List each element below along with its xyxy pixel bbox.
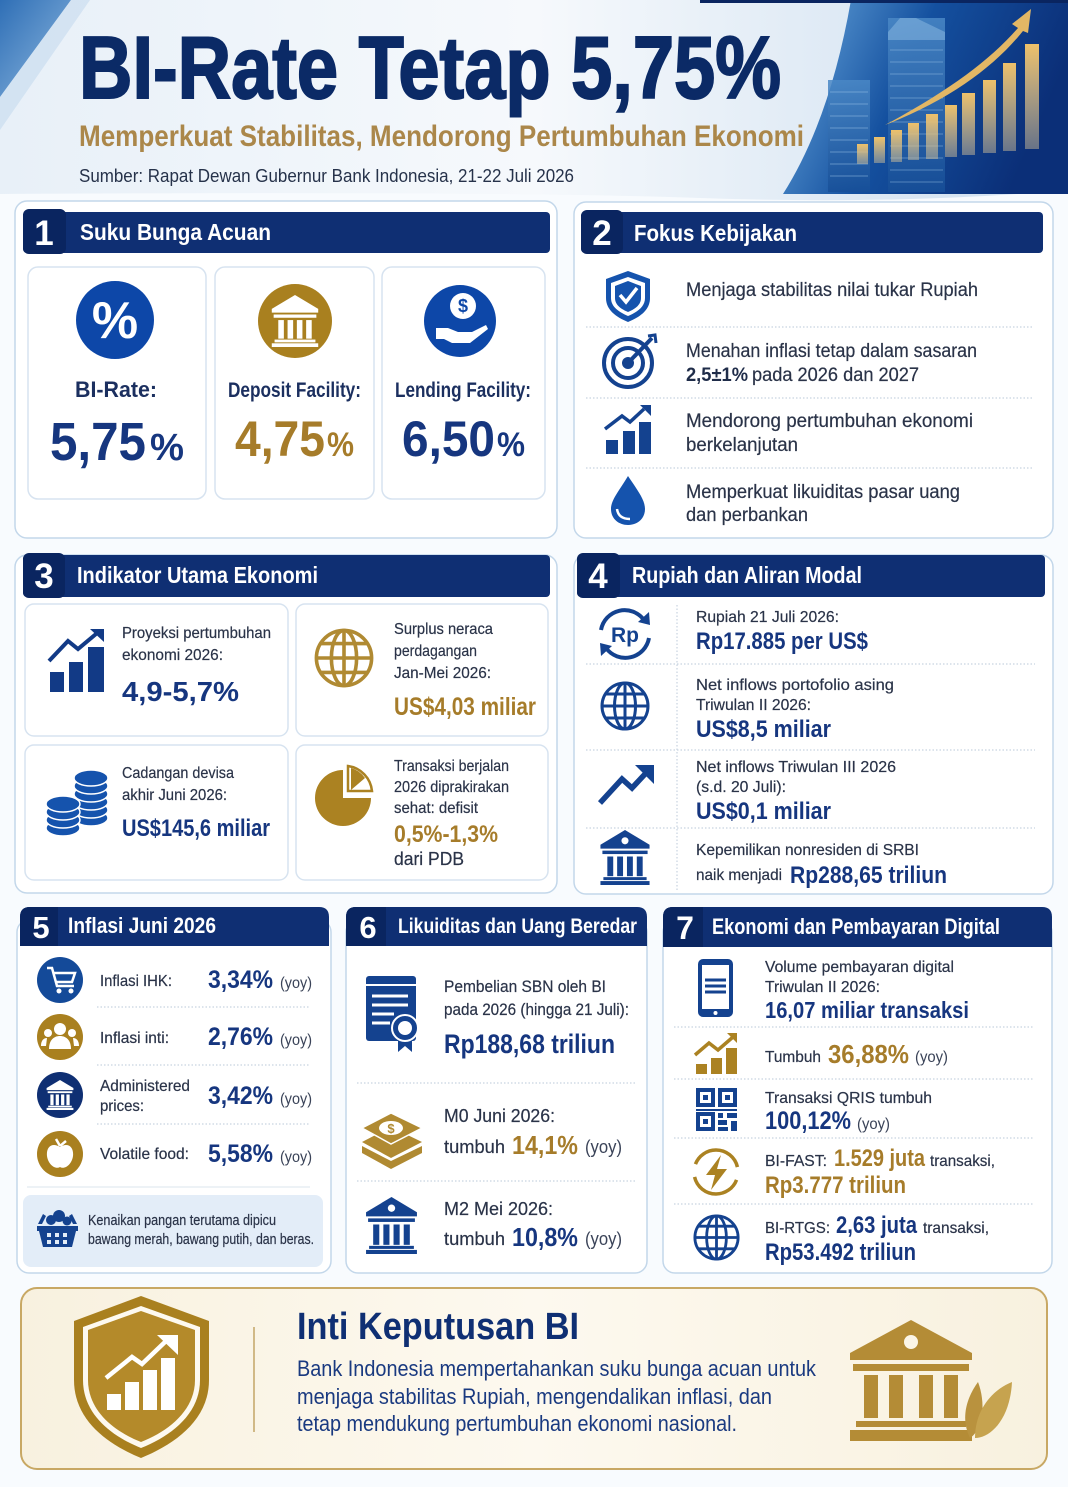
icon: basket [37, 1210, 78, 1247]
card: BI-Rate: 5,75 [50, 412, 146, 472]
callout: food prices: bawang merah, bawang putih, dan beras. [88, 1232, 314, 1248]
digital volume: Volume pembayaran digital [765, 959, 954, 976]
M2 growth: tumbuh [444, 1229, 505, 1249]
title: BI-Rate Tetap 5,75% [79, 18, 781, 117]
M2 growth: M2 Mei 2026: [444, 1199, 553, 1219]
portfolio inflow Q3: US$0,1 miliar [696, 798, 831, 825]
icon: gold bank [258, 284, 332, 358]
BI-FAST: BI-FAST: [765, 1153, 827, 1170]
SRBI ownership: naik menjadi [696, 867, 782, 884]
rupiah value [696, 609, 869, 655]
panel 6: likuiditas [346, 907, 647, 1273]
card: transaksi berjalan: sehat: defisit [394, 800, 479, 817]
SBN purchase: Rp188,68 triliun [444, 1029, 615, 1059]
icon: money stack: $ [387, 1121, 395, 1136]
icon: bank [600, 830, 650, 885]
text: pertumbuhan: berkelanjutan [686, 435, 798, 456]
text: nilai tukar: Menjaga stabilitas nilai tukar Rupiah [686, 280, 978, 301]
card: cadangan devisa [25, 745, 288, 880]
card: cadangan devisa: akhir Juni 2026: [122, 787, 227, 804]
card: cadangan devisa: US$145,6 miliar [122, 815, 270, 842]
row: inflasi inti [37, 1014, 312, 1060]
QRIS [765, 1090, 932, 1135]
callout: food prices: Kenaikan pangan terutama dipicu [88, 1213, 276, 1229]
subtitle: Memperkuat Stabilitas, Mendorong Pertumbuhan Ekonomi [79, 120, 804, 153]
panel 2: fokus kebijakan [574, 202, 1053, 538]
heading 4: Rupiah dan Aliran Modal [632, 562, 862, 588]
icon: bank in circle [37, 1072, 83, 1118]
icon: pie chart [315, 766, 372, 826]
card: surplus neraca: Surplus neraca [394, 621, 493, 638]
card: proyeksi pertumbuhan [25, 604, 288, 736]
text: pertumbuhan: Mendorong pertumbuhan ekonomi [686, 411, 973, 432]
heading 2 [581, 210, 1043, 254]
portfolio inflow Q2: US$8,5 miliar [696, 716, 831, 743]
row: administered prices: Administered [100, 1078, 190, 1095]
M0 growth: M0 Juni 2026: [444, 1106, 555, 1126]
card: BI-Rate: % [150, 427, 184, 469]
icon: hand holding coin: $ [458, 296, 468, 316]
text: inflasi: pada 2026 dan 2027 [752, 365, 919, 386]
card: cadangan devisa: Cadangan devisa [122, 765, 234, 782]
card: surplus neraca: Jan-Mei 2026: [394, 665, 491, 682]
callout: food prices [23, 1195, 323, 1267]
row: volatile food: (yoy) [280, 1149, 312, 1166]
portfolio inflow Q2 [696, 677, 894, 743]
heading 6: 6 [359, 910, 377, 945]
card: transaksi berjalan [296, 745, 548, 880]
heading 7: Ekonomi dan Pembayaran Digital [712, 914, 1000, 939]
SRBI ownership: Rp288,65 triliun [790, 862, 947, 889]
row: inflasi IHK: (yoy) [280, 975, 312, 992]
BI-RTGS: Rp53.492 triliun [765, 1239, 916, 1266]
icon: globe [695, 1216, 738, 1259]
M2 growth: (yoy) [585, 1229, 622, 1249]
M0 growth: tumbuh [444, 1137, 505, 1157]
card: Lending Facility: % [497, 426, 525, 464]
icon: QR code [696, 1088, 737, 1131]
text: inflasi: Menahan inflasi tetap dalam sasaran [686, 341, 977, 362]
row: volatile food: 5,58% [208, 1140, 273, 1168]
card: Deposit Facility [215, 267, 374, 499]
SBN purchase: pada 2026 (hingga 21 Juli): [444, 1001, 629, 1019]
summary text: menjaga stabilitas Rupiah, mengendalikan inflasi, dan [297, 1384, 772, 1409]
portfolio inflow Q3: (s.d. 20 Juli): [696, 779, 786, 796]
icon: bank [366, 1197, 417, 1254]
row: administered prices: 3,42% [208, 1082, 273, 1110]
icon: apple [37, 1131, 83, 1177]
heading 6 [346, 907, 647, 946]
text: inflasi [686, 341, 977, 386]
digital volume: 16,07 miliar transaksi [765, 997, 969, 1023]
row: inflasi inti: 2,76% [208, 1023, 273, 1051]
card: Lending Facility: 6,50 [402, 411, 495, 467]
card: Deposit Facility: Deposit Facility: [228, 379, 361, 402]
card: BI-Rate [28, 267, 206, 499]
portfolio inflow Q2: Triwulan II 2026: [696, 697, 811, 714]
growth: (yoy) [915, 1049, 948, 1066]
heading: inti keputusan: Inti Keputusan BI [297, 1306, 579, 1348]
digital volume: Triwulan II 2026: [765, 979, 880, 996]
text: likuiditas: Memperkuat likuiditas pasar uang [686, 482, 960, 503]
icon: certificate [366, 976, 418, 1052]
row: volatile food [37, 1131, 312, 1177]
row: administered prices [37, 1072, 312, 1118]
growth: 36,88% [828, 1039, 909, 1069]
icon: hand holding coin [424, 285, 496, 357]
heading 7 [663, 907, 1052, 947]
heading 3: Indikator Utama Ekonomi [77, 562, 318, 588]
digital volume [765, 959, 969, 1023]
row: inflasi IHK [37, 957, 312, 1003]
summary text [297, 1356, 817, 1436]
icon: money stack [362, 1113, 422, 1169]
M0 growth: 14,1% [512, 1130, 578, 1160]
portfolio inflow Q3: Net inflows Triwulan III 2026 [696, 759, 896, 776]
panel 4: rupiah dan aliran modal [574, 553, 1053, 894]
SRBI ownership: Kepemilikan nonresiden di SRBI [696, 842, 919, 859]
card: surplus neraca: perdagangan [394, 643, 477, 660]
card: proyeksi pertumbuhan: ekonomi 2026: [122, 647, 223, 664]
BI-FAST: transaksi, [930, 1153, 995, 1170]
panel 3: indikator utama [15, 553, 557, 893]
text: inflasi: 2,5±1% [686, 365, 748, 386]
portfolio inflow Q3 [696, 759, 896, 825]
panel 5: inflasi [17, 907, 331, 1273]
heading 1: 1 [34, 214, 54, 253]
panel: inti keputusan BI [21, 1288, 1047, 1469]
icon: rupiah cycle [600, 610, 650, 658]
icon: gold chart [695, 1033, 737, 1074]
heading 1: Suku Bunga Acuan [80, 219, 271, 245]
QRIS: Transaksi QRIS tumbuh [765, 1090, 932, 1107]
text: likuiditas: dan perbankan [686, 505, 808, 526]
row: administered prices: prices: [100, 1098, 144, 1115]
SRBI ownership [696, 842, 947, 889]
M2 growth: 10,8% [512, 1222, 578, 1252]
card: BI-Rate: BI-Rate: [75, 377, 157, 402]
BI-RTGS: 2,63 juta [836, 1212, 918, 1239]
heading 6: Likuiditas dan Uang Beredar [398, 915, 637, 938]
heading 2: Fokus Kebijakan [634, 220, 797, 246]
heading 5 [20, 907, 329, 946]
icon: rising arrow [600, 765, 654, 803]
heading 1 [23, 209, 550, 254]
icon: gold globe [316, 630, 372, 686]
heading 4 [577, 553, 1045, 598]
heading 3 [23, 553, 550, 598]
heading 7: 7 [676, 910, 694, 946]
BI-FAST: Rp3.777 triliun [765, 1172, 906, 1199]
card: Lending Facility [382, 267, 545, 499]
heading 3: 3 [34, 557, 54, 596]
source line: Sumber: Rapat Dewan Gubernur Bank Indonesia, 21-22 Juli 2026 [79, 166, 574, 186]
text: pertumbuhan [686, 411, 973, 456]
BI-RTGS: BI-RTGS: [765, 1220, 830, 1237]
panel 1: suku bunga acuan [15, 201, 557, 538]
QRIS: (yoy) [857, 1116, 890, 1133]
icon: people [37, 1014, 83, 1060]
icon: cart [37, 957, 83, 1003]
row: inflasi inti: Inflasi inti: [100, 1030, 169, 1047]
card: transaksi berjalan: 0,5%-1,3% [394, 821, 498, 848]
heading 5: Inflasi Juni 2026 [68, 913, 216, 938]
card: proyeksi pertumbuhan: 4,9-5,7% [122, 676, 239, 707]
M0 growth: (yoy) [585, 1137, 622, 1157]
card: transaksi berjalan: 2026 diprakirakan [394, 779, 509, 796]
icon: target [604, 335, 656, 387]
rupiah value: Rp17.885 per US$ [696, 628, 869, 655]
summary text: Bank Indonesia mempertahankan suku bunga acuan untuk [297, 1356, 817, 1381]
icon: phone [698, 959, 733, 1017]
row: administered prices: (yoy) [280, 1091, 312, 1108]
growth: Tumbuh [765, 1049, 821, 1066]
card: Lending Facility: Lending Facility: [395, 379, 531, 402]
portfolio inflow Q2: Net inflows portofolio asing [696, 677, 894, 694]
icon: lightning [694, 1150, 738, 1194]
icon: gold shield with chart [74, 1296, 209, 1458]
QRIS: 100,12% [765, 1107, 851, 1135]
card: surplus neraca [296, 604, 548, 736]
BI-RTGS [765, 1212, 989, 1266]
icon: growth chart [605, 405, 651, 454]
card: transaksi berjalan: Transaksi berjalan [394, 758, 509, 775]
icon: water drop [611, 476, 645, 525]
SBN purchase: Pembelian SBN oleh BI [444, 978, 606, 996]
icon: gold bank with leaves [850, 1320, 1012, 1441]
SBN purchase [444, 978, 629, 1059]
icon: percent: % [92, 292, 138, 350]
M0 growth [444, 1106, 622, 1160]
row: inflasi inti: (yoy) [280, 1032, 312, 1049]
summary text: tetap mendukung pertumbuhan ekonomi nasional. [297, 1411, 737, 1436]
card: Deposit Facility: % [327, 426, 354, 464]
BI-FAST: 1.529 juta [834, 1145, 926, 1172]
text: likuiditas [686, 482, 960, 526]
header banner [0, 0, 1068, 200]
icon: blue globe [602, 683, 648, 729]
M2 growth [444, 1199, 622, 1252]
row: volatile food: Volatile food: [100, 1146, 189, 1163]
icon: coin stacks [46, 770, 108, 836]
heading 4: 4 [588, 557, 608, 596]
icon: chart [49, 629, 104, 692]
icon: percent [76, 281, 154, 359]
heading 2: 2 [592, 214, 612, 253]
icon: rupiah cycle: Rp [611, 624, 639, 647]
heading 5: 5 [32, 910, 50, 945]
BI-FAST [765, 1145, 995, 1199]
BI-RTGS: transaksi, [923, 1220, 989, 1237]
row: inflasi IHK: Inflasi IHK: [100, 973, 172, 990]
card: transaksi berjalan: dari PDB [394, 849, 464, 869]
card: proyeksi pertumbuhan: Proyeksi pertumbuhan [122, 625, 271, 642]
illustration: skyline, bars and rising arrow [828, 9, 1039, 192]
rupiah value: Rupiah 21 Juli 2026: [696, 609, 839, 626]
row: inflasi IHK: 3,34% [208, 966, 273, 994]
card: surplus neraca: US$4,03 miliar [394, 693, 536, 721]
panel 7: pembayaran digital [663, 907, 1052, 1273]
card: Deposit Facility: 4,75 [235, 411, 325, 467]
icon: shield check [606, 271, 650, 322]
growth [765, 1039, 948, 1069]
